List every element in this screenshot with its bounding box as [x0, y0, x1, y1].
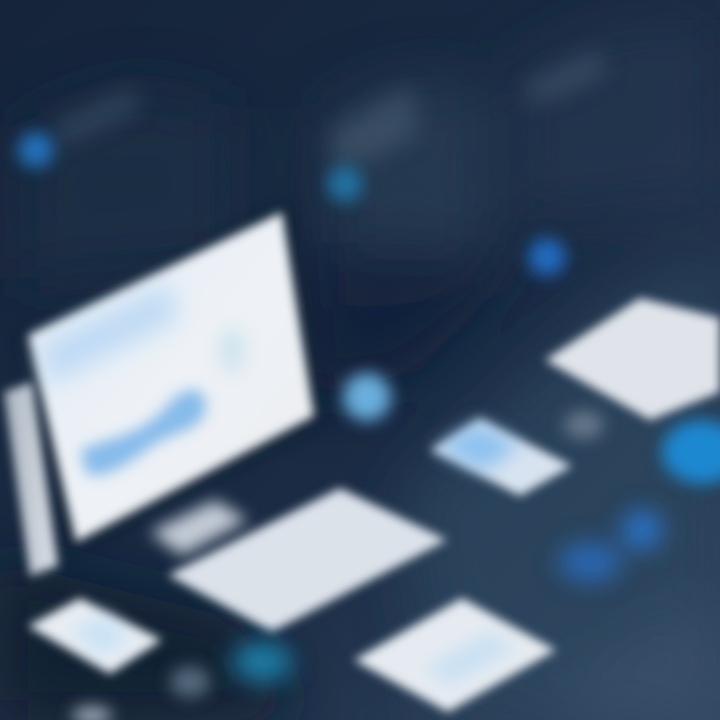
floating background label strokes [55, 50, 604, 175]
monitor stand side [4, 382, 58, 576]
icon: light blue glow dot [343, 373, 391, 421]
chart side detail [218, 326, 246, 374]
monitor shadow [20, 205, 322, 552]
chart header band [40, 282, 178, 385]
panel: monitor screen [28, 212, 314, 542]
small grey shapes [72, 411, 604, 720]
panel: centre tablet [168, 488, 447, 632]
icon: blue glow dots upper area [18, 132, 566, 276]
panel: top right card [545, 298, 720, 420]
panel: bottom left card [28, 598, 162, 674]
icon: blue cluster lower right [558, 510, 662, 582]
panel: middle small card [430, 418, 572, 496]
area chart: blue band [80, 390, 206, 475]
icon: bright blue shape right edge [662, 420, 720, 484]
icon: teal dot bottom [232, 642, 292, 682]
panel: bottom card [354, 598, 556, 712]
keyboard small [150, 500, 248, 556]
